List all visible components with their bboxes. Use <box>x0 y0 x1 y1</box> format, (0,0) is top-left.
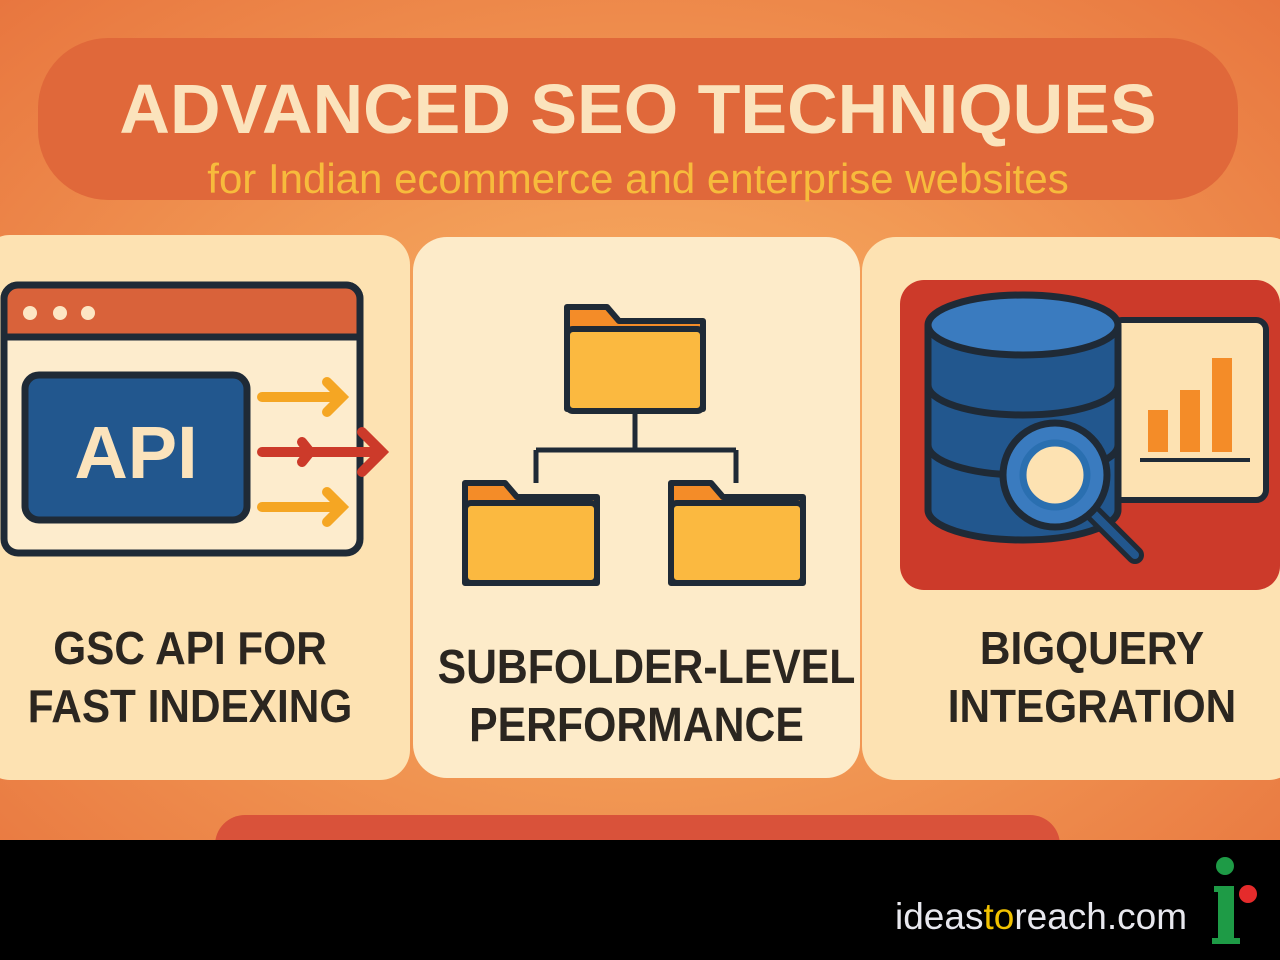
label <box>948 622 1236 732</box>
label: INTEGRATION <box>948 680 1236 732</box>
icon: folder tree <box>462 304 806 586</box>
label: BIGQUERY <box>980 622 1204 674</box>
icon: database with chart <box>900 280 1280 590</box>
icon: browser with API: API <box>74 411 198 494</box>
panel: subfolder <box>413 237 860 778</box>
bottom strip <box>215 815 1060 875</box>
logo <box>1212 857 1257 944</box>
panel: BigQuery <box>862 237 1280 780</box>
label: SUBFOLDER-LEVEL <box>438 641 855 694</box>
label: PERFORMANCE <box>469 699 804 752</box>
label <box>28 622 352 732</box>
footer bar <box>0 840 1280 960</box>
label <box>438 641 855 752</box>
label: GSC API FOR <box>53 622 327 674</box>
panel: GSC API <box>0 235 410 780</box>
title: ADVANCED SEO TECHNIQUES <box>119 70 1157 148</box>
title banner <box>38 38 1238 200</box>
label: FAST INDEXING <box>28 680 352 732</box>
brand text: ideastoreach.com <box>895 896 1187 937</box>
subtitle: for Indian ecommerce and enterprise websites <box>207 155 1069 202</box>
icon: browser with API <box>0 282 389 556</box>
